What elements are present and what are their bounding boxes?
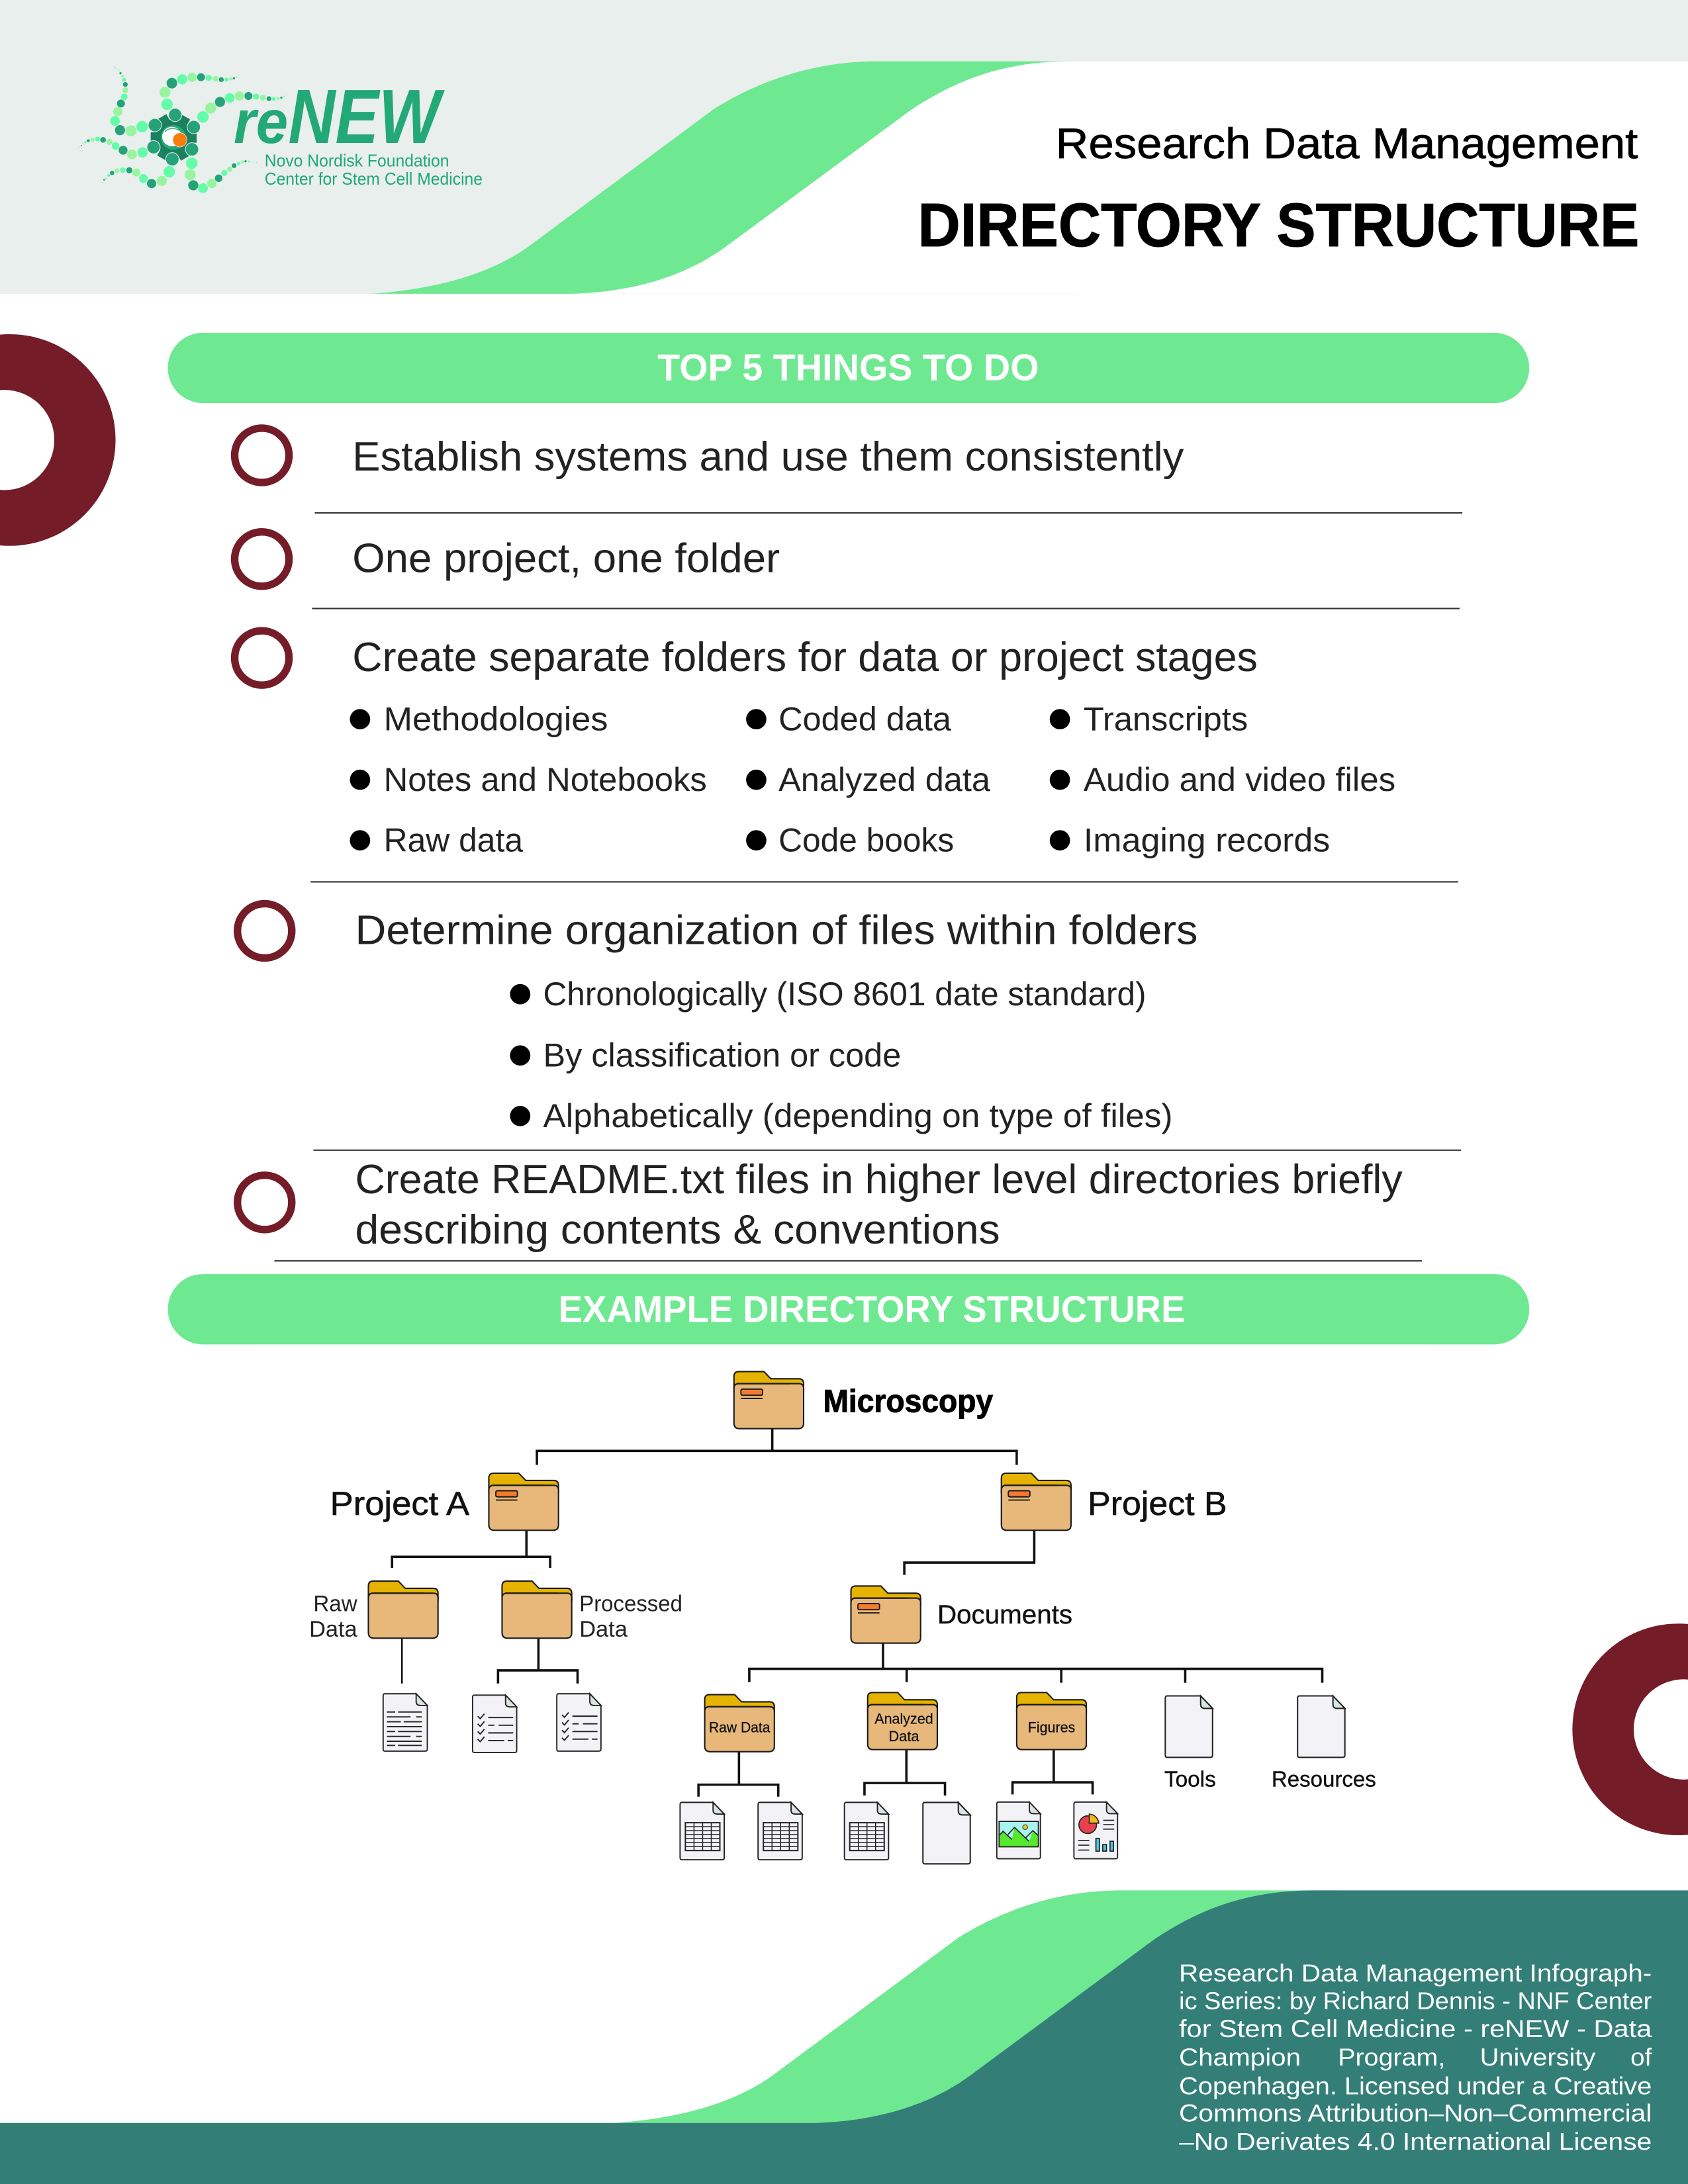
step 2	[235, 532, 780, 586]
folder: Microscopy	[734, 1371, 993, 1429]
chart document	[1074, 1802, 1117, 1859]
folder: Analyzed Data: Data	[888, 1728, 919, 1745]
footer credit text: –No Derivates 4.0 International License	[1179, 2128, 1652, 2156]
image document	[997, 1802, 1041, 1859]
footer teal panel	[0, 1890, 1688, 2184]
bullets column 2	[746, 700, 991, 859]
bullets column 3: Transcripts	[1084, 700, 1248, 738]
folder: Raw Data (Documents): Raw Data	[709, 1719, 771, 1735]
logo subtitle: Novo Nordisk Foundation	[265, 150, 449, 170]
step 1: Establish systems and use them consistently	[352, 434, 1184, 480]
bullets column 1: Raw data	[384, 821, 524, 859]
logo wordmark: re	[234, 87, 288, 156]
logo strand bottom-right	[185, 158, 257, 193]
footer credit text: University	[1480, 2044, 1596, 2071]
bullets column 3: Audio and video files	[1084, 760, 1395, 798]
document: Resources: Resources	[1272, 1767, 1376, 1792]
folder: Project B: Project B	[1088, 1484, 1227, 1522]
left maroon ring	[0, 334, 116, 546]
bullets: file organization	[510, 975, 1173, 1134]
footer credit text: ic Series: by Richard Dennis - NNF Center	[1179, 1987, 1652, 2015]
folder: Documents	[851, 1586, 1072, 1643]
dividers	[274, 513, 1462, 1261]
bullets column 1	[350, 700, 707, 859]
document: Tools: Tools	[1164, 1767, 1216, 1792]
bullets: file organization: By classification or code	[543, 1036, 901, 1074]
logo subtitle: Center for Stem Cell Medicine	[265, 169, 483, 189]
step 4: Determine organization of files within folders	[355, 907, 1197, 953]
folder: Figures	[1017, 1692, 1086, 1750]
step 3: Create separate folders for data or project stages	[352, 635, 1258, 680]
marker circle 2	[235, 532, 289, 586]
logo nucleus	[173, 133, 187, 147]
folder: Processed Data: Data	[579, 1617, 628, 1642]
spreadsheet 3	[845, 1802, 888, 1860]
footer credit text	[1179, 1960, 1652, 2156]
charts	[1078, 1814, 1114, 1851]
document: Resources	[1272, 1696, 1376, 1792]
logo: reNEW	[77, 66, 483, 193]
directory tree	[309, 1371, 1376, 1864]
footer green swoosh	[614, 1890, 1337, 2123]
title: Research Data Management	[1056, 119, 1638, 167]
footer credit text: Commons Attribution–Non–Commercial	[1179, 2099, 1652, 2126]
section banner: top 5 things: TOP 5 THINGS TO DO	[657, 347, 1039, 388]
title	[918, 119, 1639, 259]
logo subtitle	[265, 150, 483, 189]
footer credit text: of	[1630, 2044, 1652, 2071]
document: Tools	[1164, 1696, 1216, 1792]
folder: Figures: Figures	[1028, 1719, 1075, 1735]
marker circle 5	[238, 1175, 292, 1230]
folder: Documents: Documents	[937, 1600, 1072, 1629]
bullets column 1: Methodologies	[384, 700, 608, 738]
logo strand right	[197, 91, 289, 122]
step 5: Create README.txt files in higher level directories briefly	[355, 1157, 1403, 1203]
footer credit text: Research Data Management Infograph-	[1179, 1960, 1652, 1987]
folder: Processed Data	[502, 1581, 682, 1642]
step 3	[235, 631, 1395, 859]
folder: Analyzed Data: Analyzed	[874, 1711, 933, 1727]
footer credit text: Champion	[1179, 2044, 1301, 2071]
bullets column 2: Coded data	[778, 700, 952, 738]
connectors	[392, 1429, 1322, 1797]
spreadsheet 1	[680, 1802, 724, 1860]
logo gear	[151, 114, 197, 161]
footer credit text: Program,	[1338, 2044, 1445, 2071]
bullets column 3: Imaging records	[1084, 821, 1330, 859]
marker circle 1	[235, 428, 289, 482]
right maroon ring	[1572, 1623, 1688, 1835]
folder: Analyzed Data	[868, 1692, 937, 1750]
folder: Processed Data: Processed	[579, 1591, 682, 1616]
folder: Raw Data (Project A): Data	[309, 1617, 357, 1642]
spreadsheet 2	[758, 1802, 802, 1860]
document: text file	[383, 1694, 427, 1751]
document: checklist 2	[557, 1694, 601, 1751]
logo emblem	[77, 66, 289, 193]
bullets: file organization: Chronologically (ISO 8601 date standard)	[543, 975, 1147, 1013]
header background band	[0, 0, 1688, 294]
logo wordmark	[234, 73, 445, 159]
bullets column 3	[1050, 700, 1395, 859]
section banner: top 5 things	[168, 333, 1529, 403]
blank document	[923, 1802, 970, 1864]
step 4	[238, 903, 1197, 1134]
bullets column 1: Notes and Notebooks	[384, 760, 707, 798]
folder: Project A: Project A	[330, 1484, 469, 1522]
footer credit text: Copenhagen. Licensed under a Creative	[1179, 2072, 1652, 2099]
footer credit text: for Stem Cell Medicine - reNEW - Data	[1179, 2015, 1652, 2042]
header white panel	[571, 62, 1688, 294]
step 5: describing contents & conventions	[355, 1207, 1000, 1253]
bullets column 2: Code books	[778, 821, 954, 859]
logo strand top	[160, 73, 242, 110]
marker circle 3	[235, 631, 289, 685]
document: checklist 1	[473, 1695, 517, 1752]
step 2: One project, one folder	[352, 536, 780, 582]
title: DIRECTORY STRUCTURE	[918, 191, 1639, 259]
folder: Microscopy: Microscopy	[823, 1383, 993, 1419]
bullets column 2: Analyzed data	[778, 760, 991, 798]
folder: Raw Data (Project A)	[309, 1581, 438, 1642]
folder: Project A	[330, 1473, 559, 1530]
logo gear beads	[147, 109, 201, 166]
folder: Raw Data (Project A): Raw	[313, 1591, 358, 1616]
logo strand left	[77, 136, 148, 159]
logo wordmark: NEW	[289, 73, 445, 159]
folder: Project B	[1002, 1473, 1227, 1530]
logo strand bottom-left	[101, 166, 175, 188]
bullets: file organization: Alphabetically (depending on type of files)	[543, 1097, 1173, 1134]
marker circle 4	[238, 903, 292, 958]
section banner: example directory structure	[168, 1274, 1529, 1344]
picture	[999, 1821, 1039, 1846]
logo strand top-left	[110, 66, 148, 136]
section banner: example directory structure: EXAMPLE DIRECTORY STRUCTURE	[559, 1289, 1185, 1331]
header green swoosh	[371, 62, 1075, 294]
step 5	[238, 1157, 1403, 1253]
folder: Raw Data (Documents)	[705, 1695, 774, 1752]
